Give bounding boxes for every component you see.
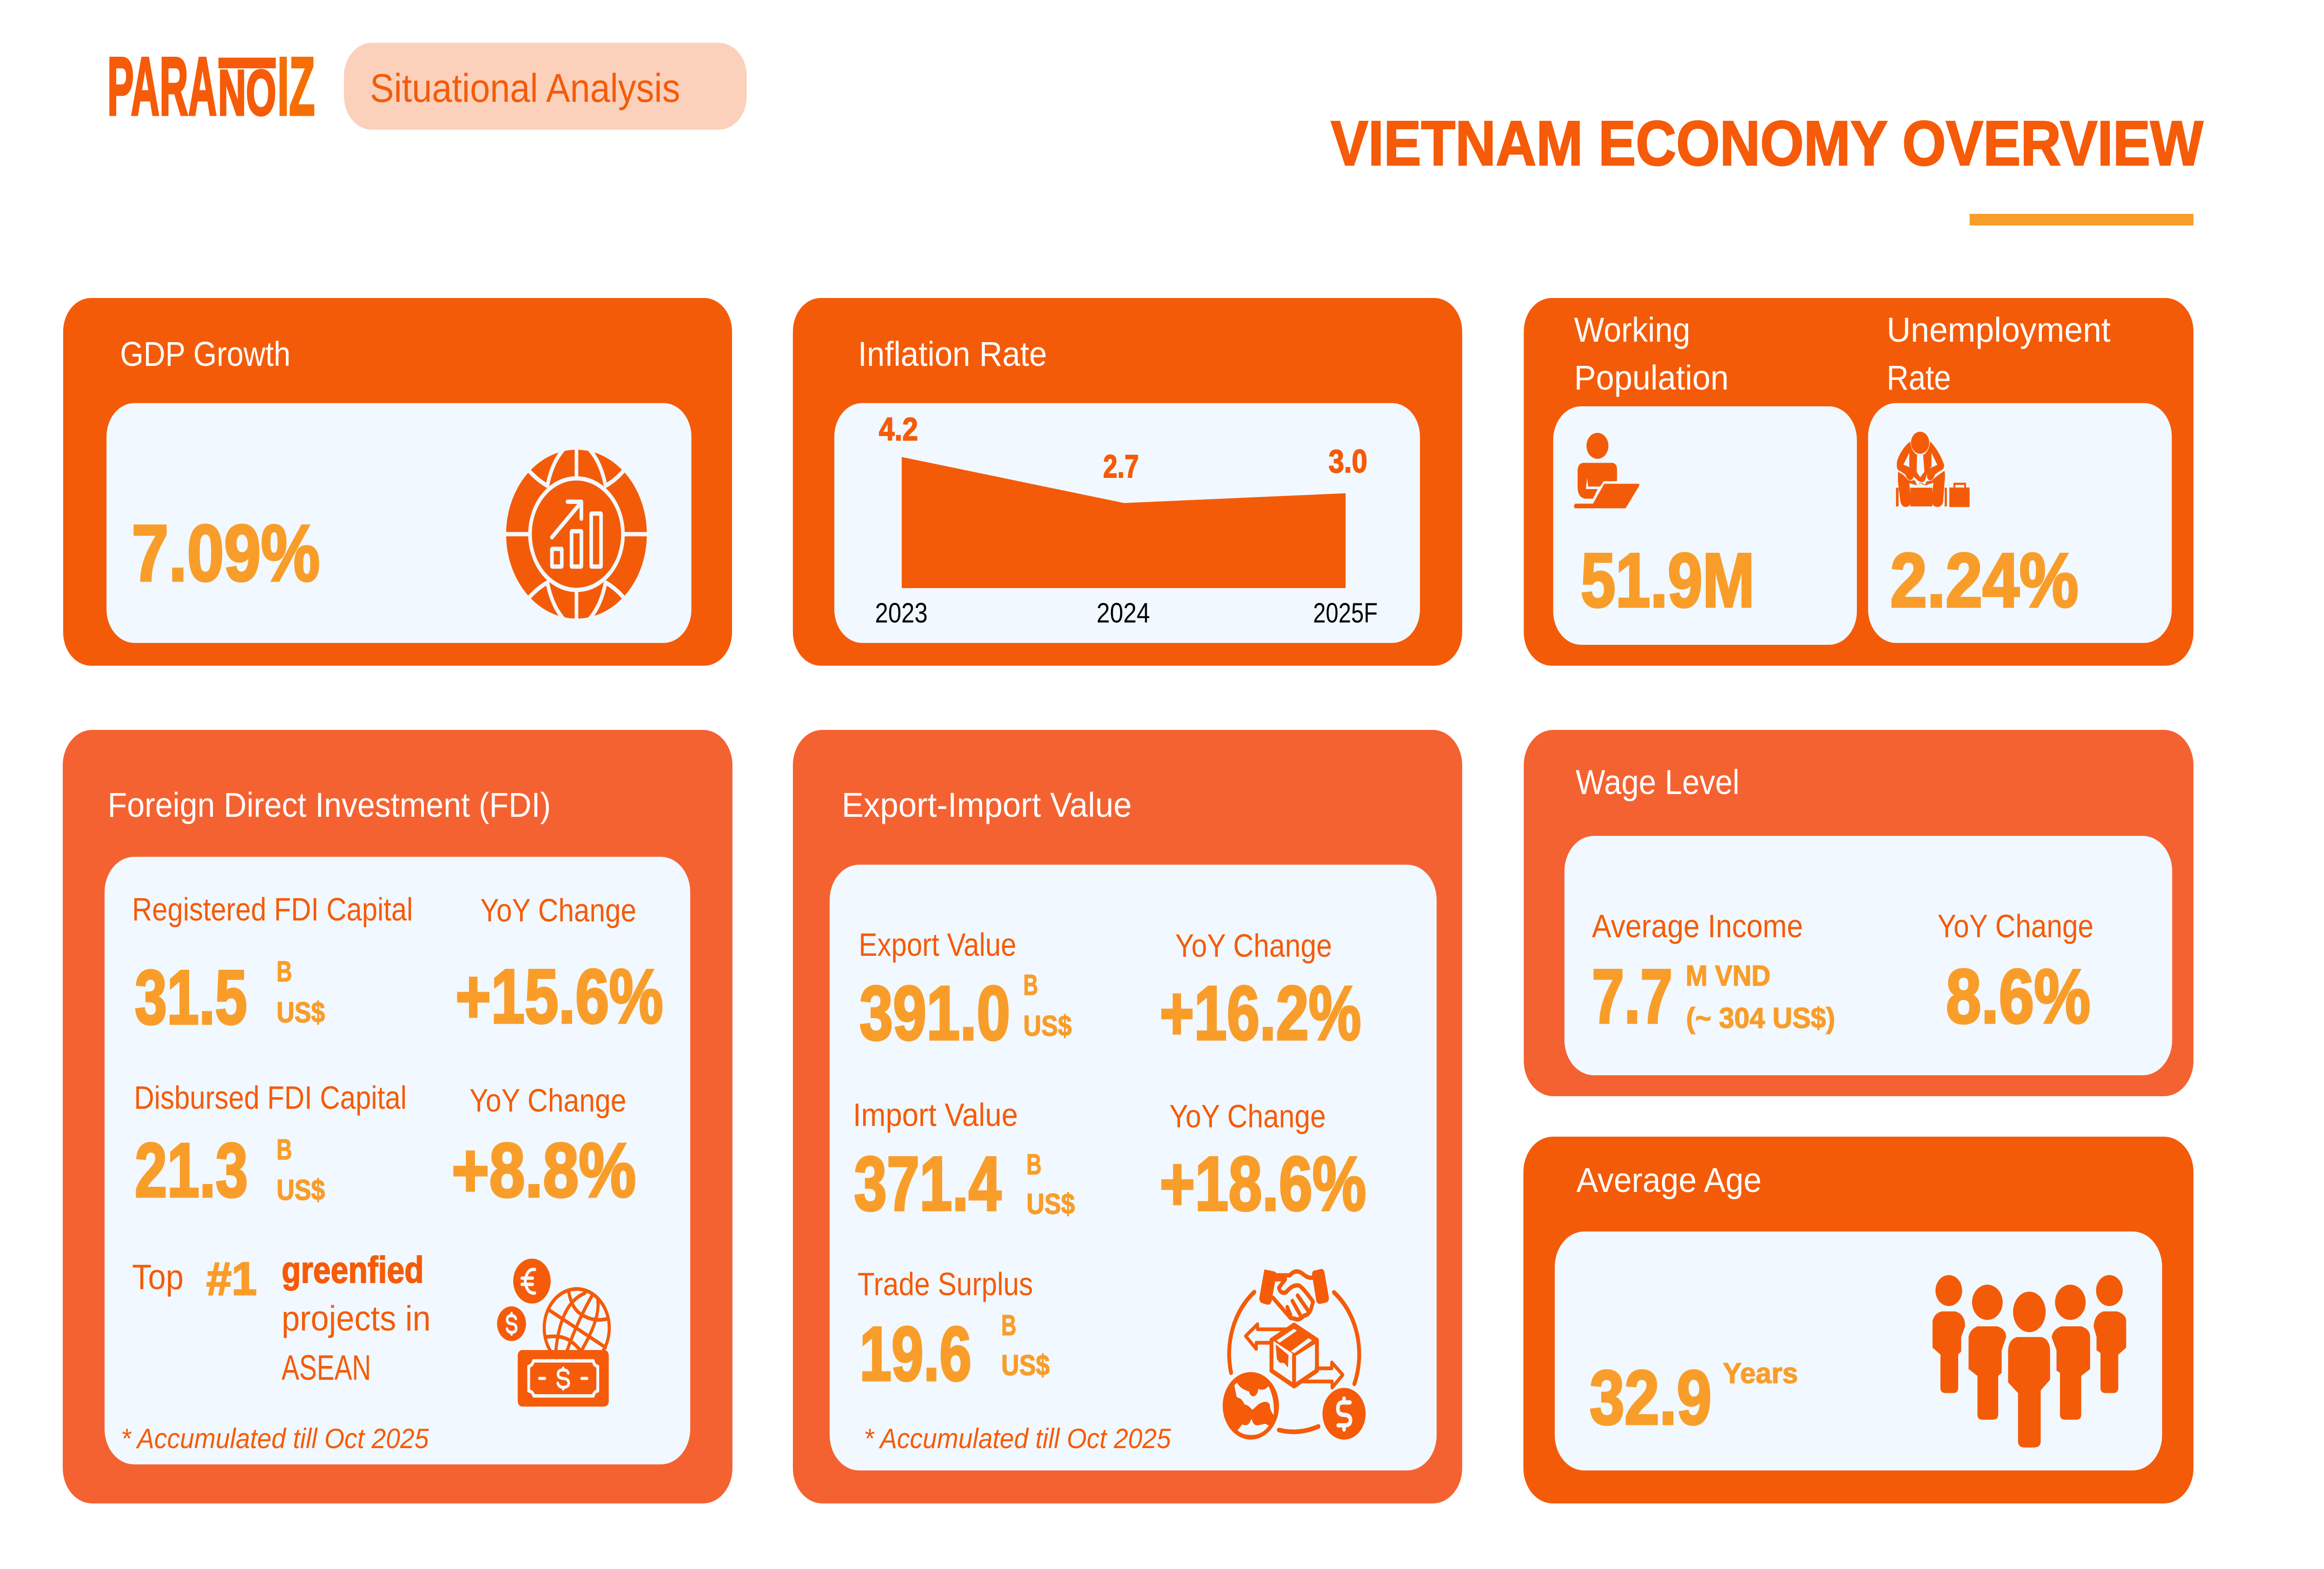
metric: import value: 371.4 xyxy=(854,1141,1001,1227)
callout: top #1 greenfield projects: Top xyxy=(132,1258,184,1297)
metric: average income: 7.7 xyxy=(1592,954,1672,1039)
panel: inflation rate xyxy=(793,298,1462,666)
metric: average income: Average Income xyxy=(1592,908,1803,944)
heading: Working Population: Working xyxy=(1574,311,1690,349)
metric: import value: Import Value xyxy=(853,1097,1018,1133)
metric: import value: US$ xyxy=(1026,1188,1075,1220)
area chart: inflation: 4.2 xyxy=(879,411,918,447)
title: VIETNAM ECONOMY OVERVIEW xyxy=(1331,108,2204,179)
title accent bar xyxy=(1970,214,2193,225)
metric: registered FDI capital xyxy=(132,891,413,1040)
icon: person at laptop xyxy=(1574,433,1639,508)
heading: GDP Growth: GDP Growth xyxy=(120,335,290,373)
metric: average income xyxy=(1592,908,1835,1039)
metric: disbursed FDI capital: US$ xyxy=(277,1174,325,1206)
area chart: inflation: 3.0 xyxy=(1328,443,1367,479)
metric: disbursed FDI capital: Disbursed FDI Capital xyxy=(134,1079,407,1116)
callout: top #1 greenfield projects: projects in xyxy=(282,1299,431,1338)
heading: Unemployment Rate: Rate xyxy=(1887,359,1951,397)
callout: top #1 greenfield projects xyxy=(132,1249,431,1387)
callout: top #1 greenfield projects: greenfied xyxy=(282,1249,424,1291)
section tag: Situational Analysis xyxy=(344,43,747,130)
metric: export value: Export Value xyxy=(859,927,1017,963)
metric: disbursed YoY change: +8.8% xyxy=(452,1128,636,1213)
metric: registered YoY change xyxy=(456,892,663,1039)
panel: wage level xyxy=(1524,730,2193,1096)
heading: Average Age: Average Age xyxy=(1577,1161,1762,1199)
heading: Unemployment Rate: Unemployment xyxy=(1887,311,2111,349)
area chart: inflation: 2023 xyxy=(875,597,928,629)
heading: Wage Level: Wage Level xyxy=(1576,763,1740,801)
panel: working population and unemployment xyxy=(1524,298,2193,666)
metric: disbursed YoY change: YoY Change xyxy=(469,1082,626,1119)
value: 7.09%: 7.09% xyxy=(132,509,320,598)
metric: import YoY change: YoY Change xyxy=(1169,1098,1326,1134)
icon: group of people xyxy=(1933,1275,2126,1448)
metric: export value xyxy=(859,927,1072,1056)
heading: Inflation Rate: Inflation Rate xyxy=(858,335,1047,373)
metric: export YoY change: +16.2% xyxy=(1160,971,1361,1056)
value: 32.9 Years: 32.9 xyxy=(1590,1355,1711,1441)
metric: registered YoY change: +15.6% xyxy=(456,954,663,1039)
metric: trade surplus: US$ xyxy=(1001,1350,1050,1382)
icon: global trade xyxy=(1223,1269,1366,1440)
panel: average age xyxy=(1524,1137,2193,1503)
area chart: inflation: 2024 xyxy=(1096,597,1150,629)
metric: trade surplus: Trade Surplus xyxy=(858,1266,1033,1302)
value: 51.9M: 51.9M xyxy=(1581,538,1755,623)
footnote: export-import: * Accumulated till Oct 2025 xyxy=(864,1423,1171,1454)
icon: globe, coins and banknote xyxy=(497,1258,609,1407)
metric: import value xyxy=(853,1097,1075,1227)
metric: trade surplus: B xyxy=(1001,1310,1017,1342)
callout: top #1 greenfield projects: #1 xyxy=(206,1253,257,1305)
footnote: FDI: * Accumulated till Oct 2025 xyxy=(121,1423,429,1454)
metric: export value: US$ xyxy=(1023,1010,1072,1042)
metric: income YoY change xyxy=(1937,908,2093,1039)
area chart: inflation: 2.7 xyxy=(1103,448,1139,484)
value: 32.9 Years xyxy=(1590,1355,1798,1441)
metric: disbursed FDI capital: B xyxy=(277,1134,292,1166)
metric: income YoY change: YoY Change xyxy=(1937,908,2093,944)
metric: registered YoY change: YoY Change xyxy=(480,892,636,928)
icon: globe with growth chart xyxy=(505,448,648,621)
metric: registered FDI capital: 31.5 xyxy=(135,955,247,1040)
metric: registered FDI capital: Registered FDI Capital xyxy=(132,891,413,927)
metric: income YoY change: 8.6% xyxy=(1946,954,2091,1039)
metric: export value: B xyxy=(1023,969,1038,1001)
area chart: inflation xyxy=(875,411,1378,629)
metric: trade surplus: 19.6 xyxy=(859,1311,971,1397)
logo: PARANOIZ: NO xyxy=(218,57,276,128)
metric: export value: 391.0 xyxy=(859,971,1010,1056)
metric: trade surplus xyxy=(858,1266,1050,1397)
metric: average income: (~ 304 US$) xyxy=(1686,1002,1835,1034)
panel: export-import value xyxy=(793,730,1462,1503)
value: 2.24%: 2.24% xyxy=(1890,538,2079,623)
metric: disbursed FDI capital xyxy=(134,1079,407,1213)
metric: disbursed FDI capital: 21.3 xyxy=(135,1128,248,1213)
panel: foreign direct investment xyxy=(63,730,733,1503)
area chart: inflation: 2025F xyxy=(1313,597,1378,629)
metric: registered FDI capital: US$ xyxy=(277,997,325,1029)
metric: import YoY change xyxy=(1160,1098,1366,1227)
handshake xyxy=(1259,1269,1329,1319)
metric: import YoY change: +18.6% xyxy=(1160,1141,1366,1227)
logo: PARANOIZ: PARA xyxy=(107,40,217,132)
heading: FDI: Foreign Direct Investment (FDI) xyxy=(108,786,551,824)
logo: PARANOIZ: IZ xyxy=(277,40,315,132)
section tag: Situational Analysis: Situational Analysis xyxy=(370,66,680,110)
metric: registered FDI capital: B xyxy=(277,956,292,988)
metric: export YoY change xyxy=(1160,927,1361,1056)
heading: Export-Import Value: Export-Import Value xyxy=(842,786,1132,824)
heading: Working Population: Population xyxy=(1574,359,1729,397)
metric: disbursed YoY change xyxy=(452,1082,636,1213)
panel: GDP growth xyxy=(63,298,732,666)
callout: top #1 greenfield projects: ASEAN xyxy=(282,1348,371,1387)
heading: Unemployment Rate xyxy=(1887,311,2111,397)
box with arrows xyxy=(1246,1324,1343,1388)
metric: average income: M VND xyxy=(1686,960,1770,992)
value: 32.9 Years: Years xyxy=(1723,1357,1798,1390)
metric: import value: B xyxy=(1026,1149,1042,1181)
heading: Working Population xyxy=(1574,311,1729,397)
icon: unemployed person with briefcase xyxy=(1896,432,1969,507)
metric: export YoY change: YoY Change xyxy=(1175,927,1332,964)
